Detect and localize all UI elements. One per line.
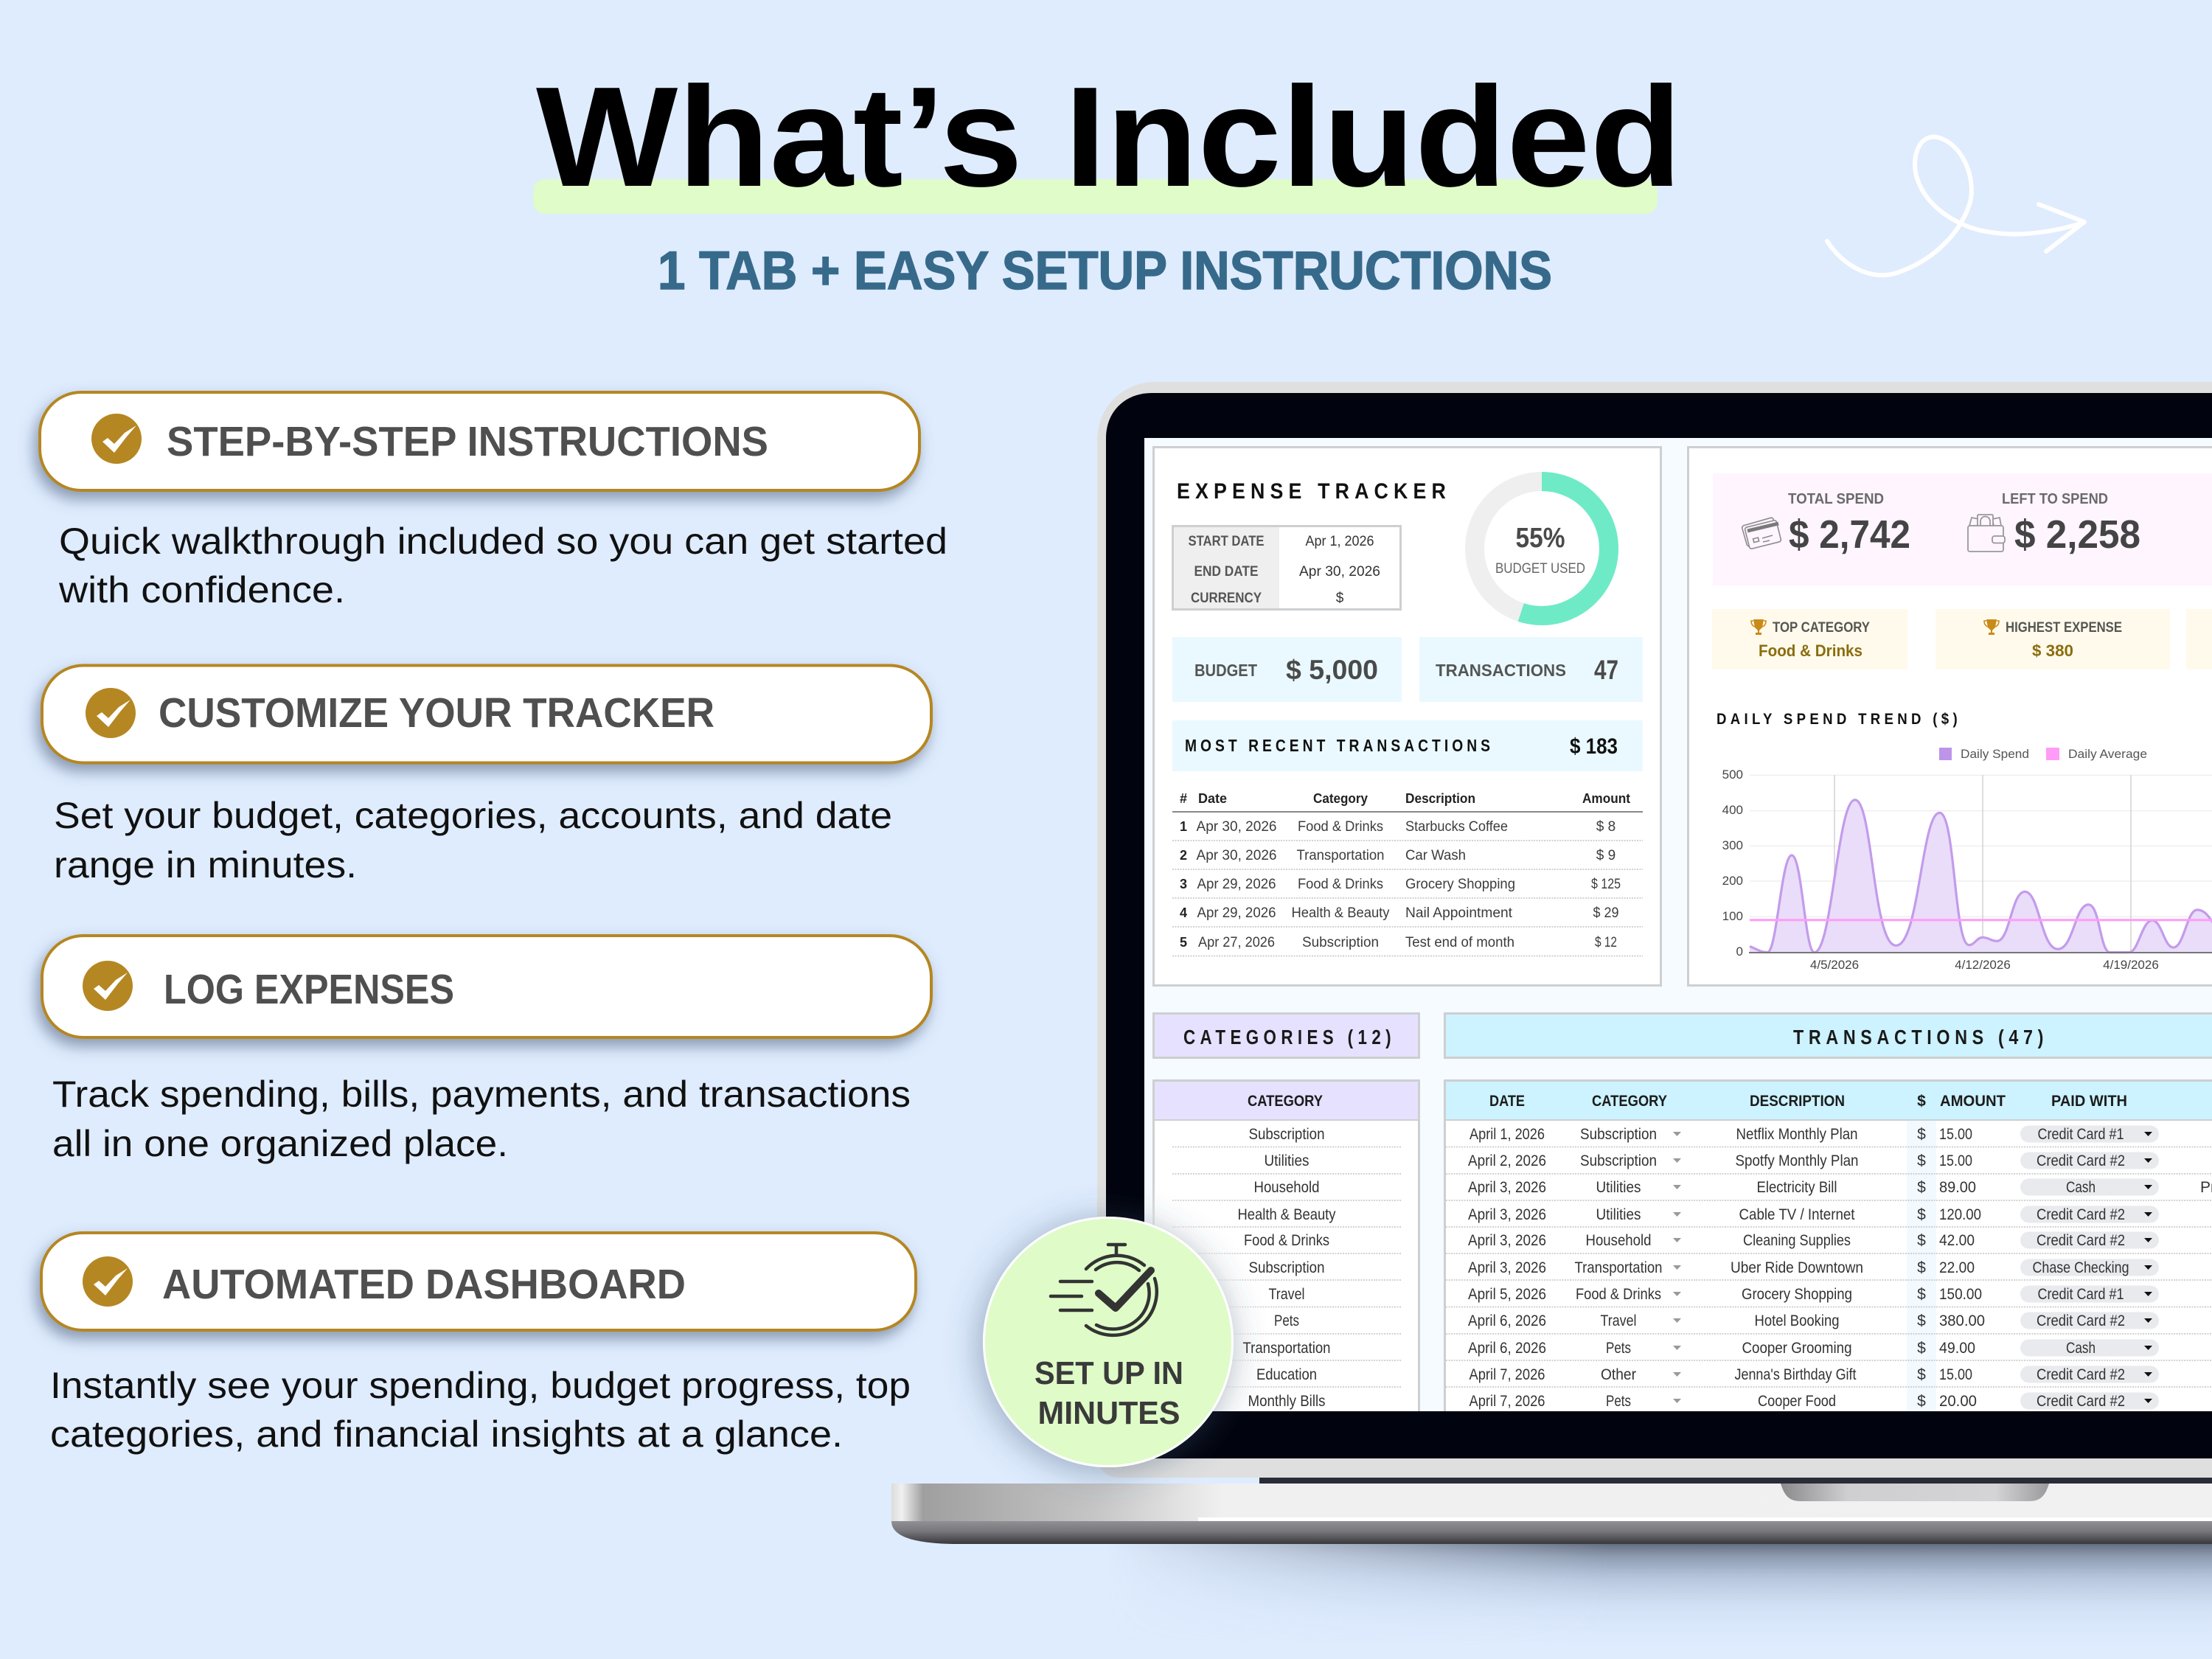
row 11: Cooper Food [1758,1393,1836,1410]
row 3: 89.00 [1939,1179,1976,1196]
description: all in one organized place. [52,1123,508,1164]
icon: decorative swirl arrow [1827,137,2084,275]
recent transactions table: 1 [1180,819,1187,834]
pink KPI band [1713,473,2212,585]
row 11: April 7, 2026 [1469,1393,1545,1410]
row 11: Pets [1606,1393,1631,1410]
row 2: 15.00 [1939,1152,1972,1169]
insight: top category: TOP CATEGORY [1773,620,1870,636]
row 2: Credit Card #2 [2037,1152,2125,1169]
description [58,521,947,611]
pink KPI band: $ 2,258 [2014,512,2140,557]
table: categories: Education [1256,1366,1317,1383]
row 11: $ [1917,1393,1926,1410]
chart legend: Daily Spend [1961,747,2029,761]
row 8: Credit Card #2 [2037,1312,2125,1329]
description: categories, and financial insights at a glance. [50,1413,843,1455]
row 7: Credit Card #1 [2038,1286,2124,1303]
row 11: 20.00 [1939,1393,1977,1410]
row 10: Jenna's Birthday Gift [1734,1366,1857,1383]
recent transactions table: 4 [1180,905,1187,920]
panel: spending dashboard [1688,447,2212,985]
subtitle: 1 TAB + EASY SETUP INSTRUCTIONS [658,241,1552,301]
row 5: $ [1917,1232,1926,1249]
area chart: daily spend: 400 [1722,803,1743,817]
pink KPI band: $ 2,742 [1789,512,1910,557]
description: Set your budget, categories, accounts, and date [54,795,892,836]
row 6: Chase Checking [2032,1259,2129,1276]
recent transactions table: $ 29 [1593,905,1619,921]
recent transactions table: Date [1198,791,1227,806]
insight: top category [1712,609,1907,669]
row 9: 49.00 [1939,1340,1975,1357]
feature 3: log expenses [42,936,931,1164]
row 9: Cash [2066,1340,2096,1357]
table header [1490,1094,2126,1107]
description: Instantly see your spending, budget progress, top [50,1365,911,1406]
recent transactions table: Subscription [1302,935,1379,950]
row 5: 42.00 [1939,1232,1975,1249]
most recent transactions bar: $ 183 [1570,734,1618,759]
row 4: Credit Card #2 [2037,1206,2125,1223]
table: categories: Food & Drinks [1244,1232,1329,1249]
recent transactions table: $ 9 [1596,848,1615,863]
row 5: Credit Card #2 [2037,1232,2125,1249]
row 8: April 6, 2026 [1468,1312,1546,1329]
recent transactions table: Apr 29, 2026 [1197,877,1276,892]
icon: trophy [1751,619,1766,635]
badge: set up in minutes [984,1218,1233,1466]
row 9: Pets [1606,1340,1631,1357]
row 1: 15.00 [1939,1126,1972,1143]
row 3: $ [1917,1179,1926,1196]
row 2: Spotfy Monthly Plan [1736,1152,1858,1169]
row 5 [1468,1234,2125,1249]
date range table: Apr 30, 2026 [1299,564,1380,580]
row 6 [1468,1261,2128,1276]
recent transactions table: Apr 30, 2026 [1196,819,1277,835]
row 6: April 3, 2026 [1468,1259,1546,1276]
insight: top category: Food & Drinks [1759,641,1863,660]
row 4: April 3, 2026 [1468,1206,1546,1223]
recent transactions table: Description [1405,791,1475,806]
recent transactions table: Transportation [1296,848,1385,863]
row 5: Cleaning Supplies [1743,1232,1851,1249]
row 2: $ [1917,1152,1926,1169]
icon: stopwatch with check mark [1051,1245,1157,1335]
area chart: daily spend: 4/12/2026 [1955,958,2011,972]
row 1: $ [1917,1126,1926,1143]
row 8: 380.00 [1939,1312,1985,1329]
area chart: daily spend: 200 [1722,874,1743,888]
recent transactions table: Test end of month [1405,935,1514,950]
area chart: daily spend: 100 [1722,909,1743,923]
date range table: END DATE [1194,564,1258,580]
recent transactions table: Starbucks Coffee [1405,819,1508,835]
row 1: April 1, 2026 [1470,1126,1545,1143]
row 1 [1470,1127,2124,1143]
row 3: Utilities [1596,1179,1641,1196]
badge: set up in minutes: SET UP IN [1034,1355,1183,1391]
heading: expense tracker: EXPENSE TRACKER [1177,479,1451,504]
table: categories [1152,1079,1420,1411]
table: categories: Monthly Bills [1248,1393,1326,1410]
pill heading [42,936,931,1037]
recent transactions table: Apr 27, 2026 [1198,935,1275,950]
date range table: $ [1336,591,1344,606]
row 7: April 5, 2026 [1468,1286,1546,1303]
recent transactions table: 5 [1180,935,1187,950]
stat: transactions: 47 [1594,655,1618,685]
stat: budget: $ 5,000 [1286,655,1378,685]
date range table [1172,526,1401,609]
row 7: $ [1917,1286,1926,1303]
most recent transactions bar [1172,720,1643,771]
row 9: April 6, 2026 [1468,1340,1546,1357]
area chart: daily spend: 0 [1736,945,1743,959]
laptop lid and screen bezel [1097,382,2212,1478]
insight: highest expense [1935,609,2170,669]
recent transactions table: # [1180,791,1187,806]
area chart: daily spend: 300 [1722,838,1743,852]
recent transactions table: Amount [1582,791,1630,806]
table header: CATEGORY [1592,1093,1667,1110]
table: categories: Utilities [1264,1152,1310,1169]
recent transactions table: Category [1313,791,1368,806]
description: Track spending, bills, payments, and transactions [52,1074,911,1115]
heading bar: categories: CATEGORIES (12) [1183,1026,1396,1048]
area chart: daily spend: 4/5/2026 [1810,958,1859,972]
row 1: Credit Card #1 [2038,1126,2124,1143]
row 6: $ [1917,1259,1926,1276]
heading bar: transactions: TRANSACTIONS (47) [1793,1026,2048,1048]
row 7: Grocery Shopping [1742,1286,1852,1303]
laptop base [891,1478,2212,1544]
insight: highest expense: HIGHEST EXPENSE [2006,620,2122,636]
feature 1: step-by-step instructions [40,392,947,611]
row 4: Cable TV / Internet [1739,1206,1855,1223]
description [54,795,892,886]
description [50,1365,911,1455]
recent transactions table: $ 125 [1591,877,1621,892]
title: What's Included: What’s Included [536,57,1682,216]
donut chart: budget used: BUDGET USED [1495,561,1585,577]
row 9: $ [1917,1340,1926,1357]
pill heading [40,392,919,490]
recent transactions table: Nail Appointment [1405,905,1513,921]
row 9: Cooper Grooming [1742,1340,1852,1357]
shadow under laptop [1135,1544,2212,1618]
badge: set up in minutes: MINUTES [1038,1395,1180,1431]
pill heading: STEP-BY-STEP INSTRUCTIONS [167,418,768,465]
recent transactions table: Grocery Shopping [1405,877,1515,892]
row 7: Food & Drinks [1576,1286,1661,1303]
payment pills and dropdown arrows [1673,1125,2159,1410]
area chart: daily spend: 500 [1722,768,1743,782]
feature 4: automated dashboard [41,1233,916,1455]
row 2: April 2, 2026 [1468,1152,1546,1169]
row 4: $ [1917,1206,1926,1223]
row 6: Uber Ride Downtown [1731,1259,1863,1276]
row 2: Subscription [1580,1152,1657,1169]
row 5: Household [1585,1232,1652,1249]
row 4: Utilities [1596,1206,1641,1223]
stat: budget [1172,637,1402,702]
row 7: 150.00 [1939,1286,1982,1303]
pink KPI band: TOTAL SPEND [1788,491,1884,507]
table: categories: Transportation [1243,1340,1330,1357]
table: categories: Health & Beauty [1237,1206,1336,1223]
table header: DESCRIPTION [1750,1093,1845,1110]
date range table: CURRENCY [1191,591,1262,606]
row 3: April 3, 2026 [1468,1179,1546,1196]
donut chart: budget used [1475,481,1609,616]
row 8: Hotel Booking [1755,1312,1839,1329]
donut chart: budget used: 55% [1516,523,1565,554]
table header: AMOUNT [1940,1093,2006,1110]
recent transactions table: Food & Drinks [1298,819,1383,835]
heading bar: categories [1153,1013,1419,1057]
recent transactions table: Food & Drinks [1298,877,1383,892]
description: range in minutes. [54,844,357,886]
row 11: Credit Card #2 [2037,1393,2125,1410]
table header: PAID WITH [2051,1093,2127,1110]
panel: expense tracker summary [1153,447,1660,985]
table: categories: CATEGORY [1248,1093,1323,1110]
row 4 [1468,1208,2125,1222]
row 6: 22.00 [1939,1259,1975,1276]
row 7 [1468,1287,2124,1302]
description: with confidence. [58,569,345,611]
row 1: Netflix Monthly Plan [1736,1126,1858,1143]
row 10: 15.00 [1939,1366,1972,1383]
recent transactions table: Apr 30, 2026 [1196,848,1277,863]
recent transactions table: $ 12 [1595,935,1617,950]
pink KPI band: LEFT TO SPEND [2002,491,2108,507]
pill heading [42,665,931,762]
row 10: Credit Card #2 [2037,1366,2125,1383]
stat: transactions: TRANSACTIONS [1436,661,1566,680]
table: categories: Pets [1274,1312,1299,1329]
row 10: $ [1917,1366,1926,1383]
row 5: April 3, 2026 [1468,1232,1546,1249]
recent transactions table: 3 [1180,877,1187,891]
date range table: START DATE [1189,534,1264,549]
description: Quick walkthrough included so you can get started [59,521,947,562]
pill heading: LOG EXPENSES [164,966,454,1013]
recent transactions table [1172,791,1643,956]
table: categories: Household [1253,1179,1320,1196]
area chart: daily spend: 4/19/2026 [2103,958,2159,972]
stat: transactions [1419,637,1643,702]
most recent transactions bar: MOST RECENT TRANSACTIONS [1185,736,1494,755]
chart legend: Daily Average [2068,747,2147,761]
insight: highest expense: $ 380 [2032,641,2073,660]
insight box: third card cut off [2186,609,2212,669]
row 2 [1468,1154,2125,1169]
date range table: Apr 1, 2026 [1305,534,1374,549]
chart legend [1939,747,2147,761]
pill heading [41,1233,916,1330]
feature 2: customize your tracker [42,665,931,886]
row 1: Subscription [1580,1126,1657,1143]
row 11 [1469,1394,2125,1410]
row 3: Cash [2066,1179,2096,1196]
area chart: daily spend [1722,768,2212,972]
pill heading: AUTOMATED DASHBOARD [162,1261,686,1308]
table header: $ [1917,1093,1926,1110]
table: categories: Subscription [1249,1259,1324,1276]
recent transactions table: $ 8 [1596,819,1615,835]
table: categories: Travel [1268,1286,1305,1303]
row 3: Electricity Bill [1756,1179,1837,1196]
row 8 [1468,1314,2125,1329]
row 8: Travel [1600,1312,1637,1329]
recent transactions table: Car Wash [1405,848,1466,863]
table header: DATE [1489,1093,1525,1110]
stat: budget: BUDGET [1194,661,1257,680]
row 9 [1468,1341,2095,1357]
row 10: April 7, 2026 [1469,1366,1545,1383]
description [52,1074,911,1164]
recent transactions table: 2 [1180,848,1187,863]
icon: wallet with cash [1968,515,2005,552]
recent transactions table: Health & Beauty [1292,905,1390,921]
pill heading: CUSTOMIZE YOUR TRACKER [159,689,714,737]
icon: trophy [1984,619,1999,635]
row 10 [1469,1368,2125,1383]
row 3 [1468,1180,2212,1196]
icon: credit cards [1742,517,1781,549]
heading bar: transactions [1445,1013,2212,1057]
heading: daily spend trend: DAILY SPEND TREND ($) [1717,711,1961,728]
table: categories: Subscription [1249,1126,1324,1143]
recent transactions table: Apr 29, 2026 [1197,905,1276,921]
row 10: Other [1601,1366,1636,1383]
table: transactions [1445,1081,2212,1435]
row 4: 120.00 [1939,1206,1981,1223]
row 6: Transportation [1575,1259,1662,1276]
row 8: $ [1917,1312,1926,1329]
